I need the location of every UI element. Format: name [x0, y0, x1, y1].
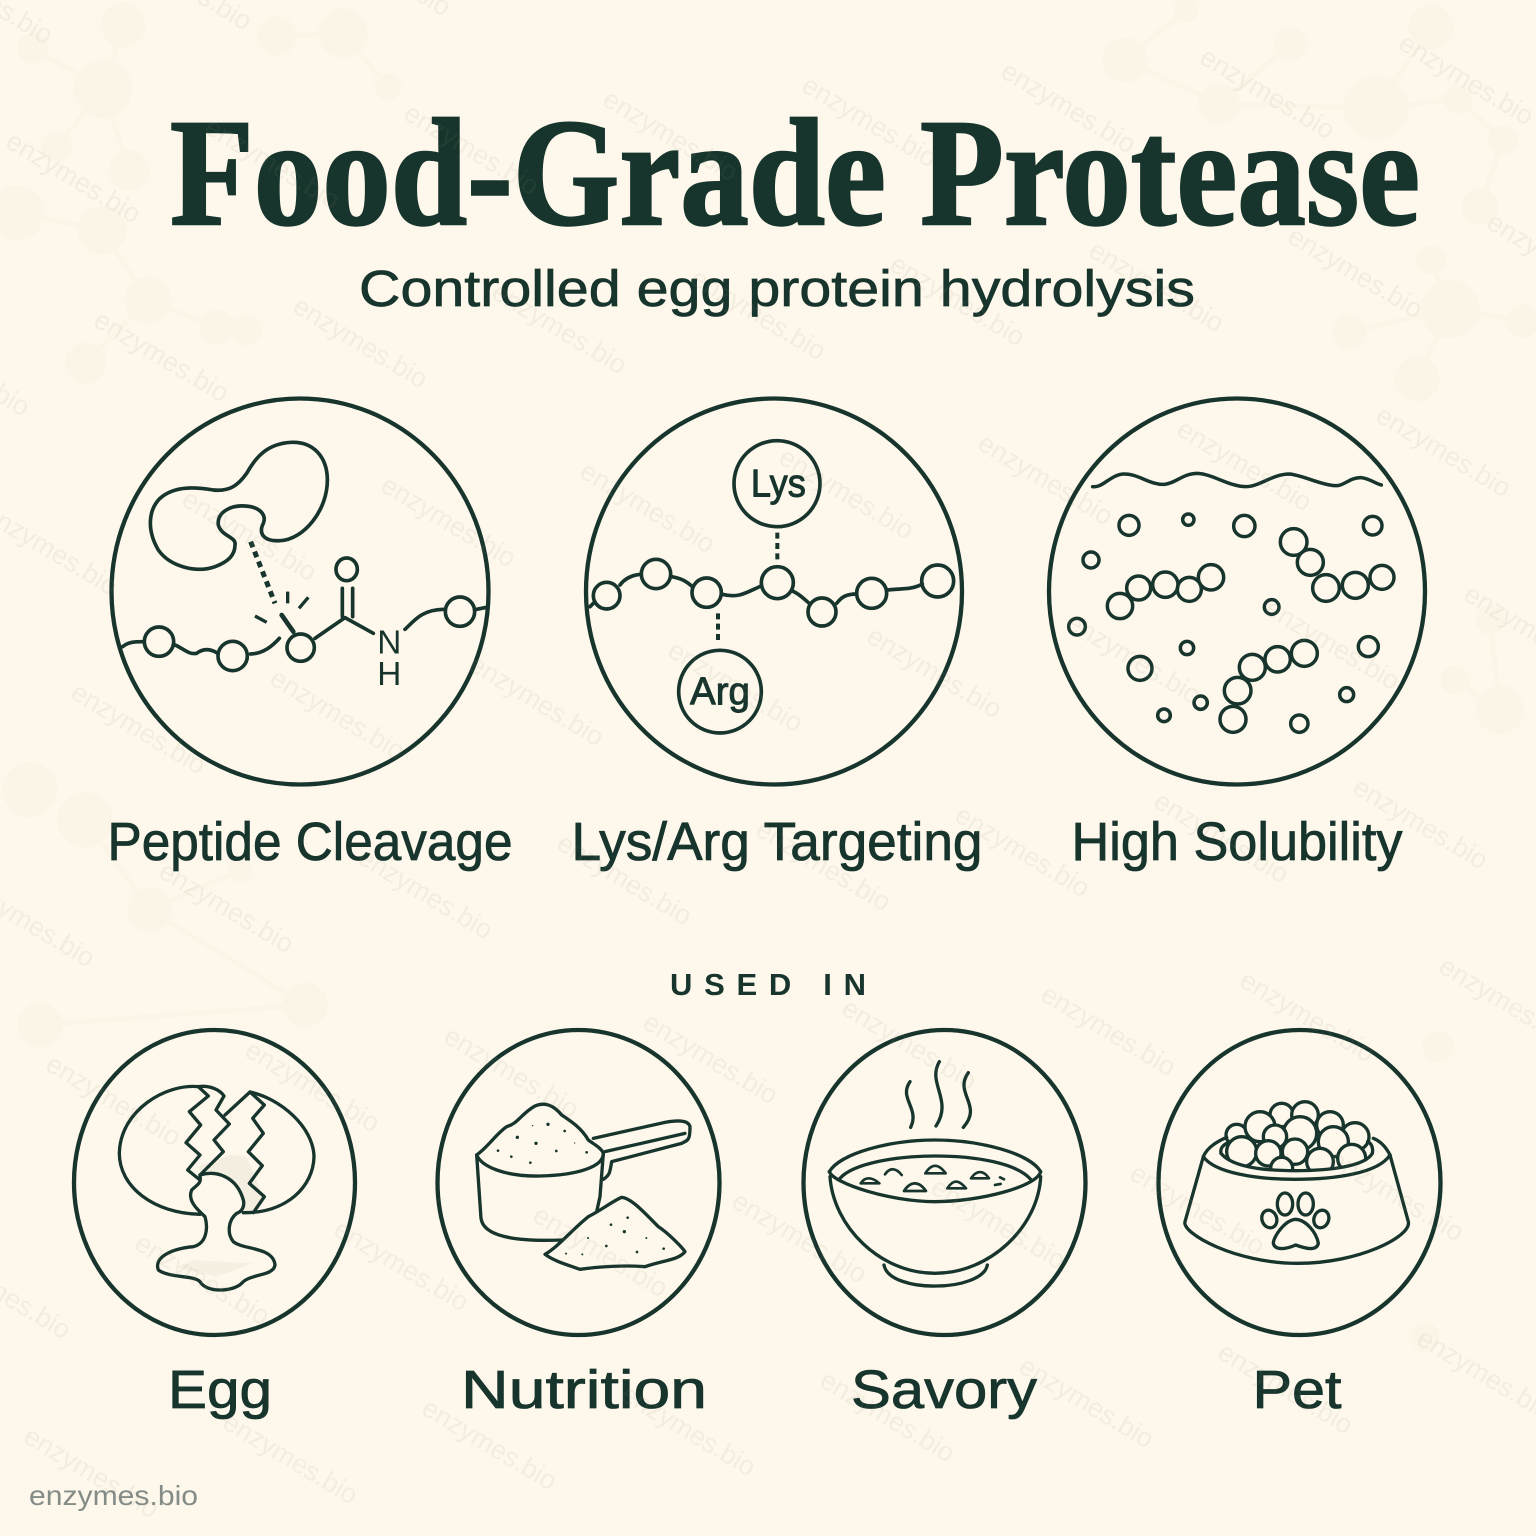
pet bowl	[1185, 1102, 1408, 1263]
text: enzymes.bio	[439, 1020, 584, 1124]
watermark: enzymes.bio	[29, 1480, 198, 1511]
text: enzymes.bio	[1283, 220, 1428, 324]
text: enzymes.bio	[1213, 1336, 1358, 1440]
text: enzymes.bio	[353, 841, 498, 945]
text: enzymes.bio	[200, 111, 345, 215]
text: enzymes.bio	[638, 1006, 783, 1110]
text: enzymes.bio	[815, 1364, 960, 1468]
text: enzymes.bio	[950, 799, 1095, 903]
text: enzymes.bio	[487, 276, 632, 380]
text: enzymes.bio	[1324, 1143, 1469, 1247]
text: enzymes.bio	[417, 1392, 562, 1496]
scoop and powder	[477, 1104, 690, 1269]
text: enzymes.bio	[288, 290, 433, 394]
text: enzymes.bio	[19, 1420, 164, 1524]
text: enzymes.bio	[376, 469, 521, 573]
soup bowl	[829, 1062, 1041, 1286]
text: enzymes.bio	[686, 262, 831, 366]
text: enzymes.bio	[797, 69, 942, 173]
text: enzymes.bio	[265, 662, 410, 766]
text: enzymes.bio	[154, 855, 299, 959]
text: enzymes.bio	[727, 1185, 872, 1289]
text: enzymes.bio	[837, 992, 982, 1096]
panel: peptide cleavage icon	[112, 398, 488, 784]
label: high solubility: High Solubility	[1072, 812, 1402, 872]
Lys/Arg chain detail: Arg	[690, 670, 750, 713]
Lys/Arg chain detail: Lys	[751, 463, 806, 506]
text: enzymes.bio	[862, 620, 1007, 724]
panel: high solubility icon	[1049, 398, 1425, 784]
peptide cleavage detail: H	[377, 656, 401, 693]
text: enzymes.bio	[1014, 1350, 1159, 1454]
text: enzymes.bio	[329, 1213, 474, 1317]
text: enzymes.bio	[751, 813, 896, 917]
panel: pet food icon	[1158, 1030, 1440, 1335]
panel: savory icon	[804, 1030, 1086, 1335]
text: enzymes.bio	[885, 248, 1030, 352]
text: enzymes.bio	[552, 827, 697, 931]
label: savory: Savory	[851, 1360, 1037, 1420]
text: enzymes.bio	[1235, 964, 1380, 1068]
text: enzymes.bio	[996, 55, 1141, 159]
text: enzymes.bio	[528, 1199, 673, 1303]
text: enzymes.bio	[1061, 606, 1206, 710]
text: enzymes.bio	[973, 427, 1118, 531]
peptide cleavage detail: N	[377, 624, 401, 661]
text: enzymes.bio	[1, 125, 146, 229]
panel: nutrition icon	[438, 1030, 720, 1335]
text: enzymes.bio	[1394, 27, 1536, 131]
text: enzymes.bio	[1036, 978, 1181, 1082]
text: enzymes.bio	[177, 483, 322, 587]
text: enzymes.bio	[598, 83, 743, 187]
text: enzymes.bio	[1260, 592, 1405, 696]
text: enzymes.bio	[218, 1406, 363, 1510]
Lys/Arg chain detail	[590, 441, 954, 733]
solubility particles	[1069, 473, 1394, 732]
text: enzymes.bio	[926, 1171, 1071, 1275]
text: enzymes.bio	[1149, 785, 1294, 889]
title: Food-Grade Protease	[170, 89, 1420, 258]
text: enzymes.bio	[1084, 234, 1229, 338]
text: enzymes.bio	[1172, 413, 1317, 517]
text: enzymes.bio	[1348, 771, 1493, 875]
text: enzymes.bio	[774, 441, 919, 545]
label: egg: Egg	[168, 1360, 272, 1420]
label: Lys/Arg targeting: Lys/Arg Targeting	[572, 812, 982, 872]
text: enzymes.bio	[1125, 1157, 1270, 1261]
panel: Lys/Arg targeting icon	[586, 398, 962, 784]
text: enzymes.bio	[616, 1378, 761, 1482]
text: enzymes.bio	[66, 676, 211, 780]
text: enzymes.bio	[464, 648, 609, 752]
text: enzymes.bio	[1195, 41, 1340, 145]
label: peptide cleavage: Peptide Cleavage	[108, 812, 512, 872]
text: enzymes.bio	[89, 304, 234, 408]
text: enzymes.bio	[1371, 399, 1516, 503]
text: enzymes.bio	[130, 1227, 275, 1331]
text: enzymes.bio	[399, 97, 544, 201]
peptide cleavage detail	[123, 442, 487, 693]
section heading: used in: USED IN	[670, 967, 866, 1002]
label: nutrition: Nutrition	[461, 1360, 707, 1420]
text: enzymes.bio	[240, 1034, 385, 1138]
text: enzymes.bio	[663, 634, 808, 738]
cracked egg	[119, 1086, 314, 1290]
subtitle: Controlled egg protein hydrolysis	[359, 260, 1195, 317]
panel: egg icon	[74, 1030, 355, 1335]
text: enzymes.bio	[41, 1048, 186, 1152]
text: enzymes.bio	[575, 455, 720, 559]
label: pet: Pet	[1252, 1360, 1342, 1420]
